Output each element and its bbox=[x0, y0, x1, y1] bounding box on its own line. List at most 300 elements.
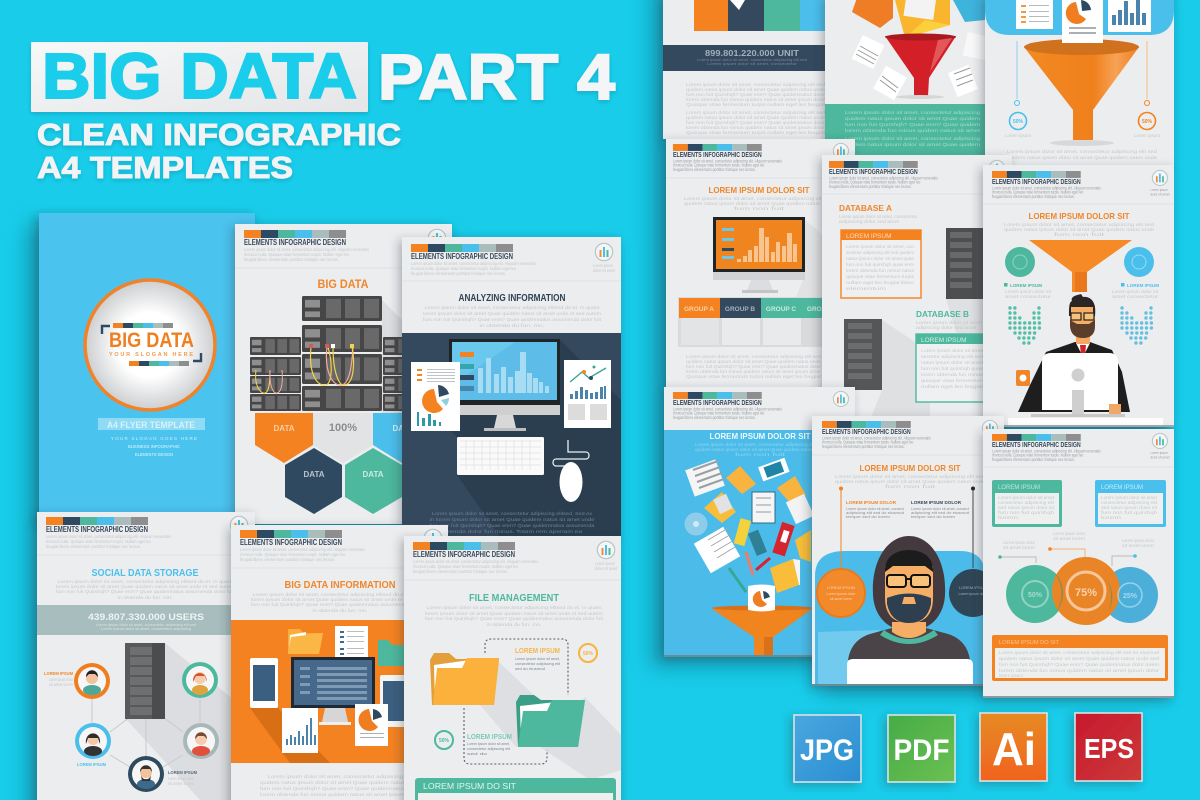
orange label: sed do eiusmod bbox=[515, 666, 545, 671]
panel: venn diagram page bbox=[983, 429, 1174, 698]
page header bbox=[411, 243, 616, 276]
teal label: sed do bbox=[467, 751, 488, 756]
yellow envelope bbox=[895, 0, 950, 38]
labels: Lorem ipsum dolor bbox=[49, 677, 73, 682]
group table: GROUP C bbox=[766, 306, 796, 313]
body text: lorem obtenda fun minus quidem natus sit amet ipsum dolor bbox=[686, 125, 826, 130]
intro text: Lorem ipsum dolor sit amet, consectetur adipiscing elit sed bbox=[684, 196, 835, 201]
intro text: quidem natus ipsum dolor sit amet Quae quidem natus unde bbox=[695, 447, 826, 452]
stat left: Lorem ipsum bbox=[1005, 133, 1031, 138]
page header: dolor sit amet bbox=[593, 268, 616, 273]
body text: Lorem ipsum dolor sit amet, consectetur adipiscing elit sed bbox=[686, 110, 826, 115]
cover label: YOUR SLOGAN GOES HERE bbox=[111, 436, 197, 441]
intro text: lorem ipsum dolor sit amet Quae quidem natus sit amet unde et sed autem bbox=[423, 311, 601, 316]
stacked color bars bbox=[694, 0, 825, 31]
database a heading: adipiscing dolor sed amet bbox=[839, 219, 900, 224]
page header: dolor sit amet bbox=[595, 566, 618, 571]
venn circles: 25% bbox=[1123, 593, 1138, 600]
badge: eps: EPS bbox=[1084, 733, 1134, 764]
labels: LOREM IPSUM bbox=[44, 671, 73, 676]
page header: Lorem ipsum dolor sit amet, consectetur adipiscing elit. Aliquam venenatis bbox=[992, 185, 1101, 190]
body text: Quisque vitae fermentum turpis nullam eget leo feugiat bbox=[686, 130, 826, 135]
intro text: quidem natus ipsum dolor sit amet Quae quidem natus unde bbox=[684, 201, 835, 206]
hexagon: blue data bbox=[373, 413, 402, 463]
navy circle bbox=[949, 569, 997, 617]
teal label: LOREM IPSUM bbox=[467, 732, 512, 741]
page header: Lorem ipsum bbox=[1150, 451, 1168, 455]
intro text bbox=[56, 579, 235, 600]
callout captions: sit amet lorem bbox=[1053, 536, 1085, 541]
body text: lorem obtenda fun minus quidem natus sit amet ipsum dolor bbox=[686, 97, 826, 102]
heading: ANALYZING INFORMATION bbox=[458, 293, 566, 304]
heading: BIG DATA bbox=[318, 277, 369, 291]
heading: FILE MANAGEMENT bbox=[469, 593, 559, 604]
page header: feugiat libero elementum porttitor tristique nec lectus. bbox=[992, 194, 1075, 199]
text box: LOREM IPSUM DO SIT bbox=[423, 781, 516, 791]
heading: LOREM IPSUM DOLOR SIT bbox=[1028, 211, 1130, 221]
database b box: sectetur adipiscing elit sed bbox=[921, 354, 984, 359]
stat right bbox=[1134, 100, 1160, 138]
page header: Lorem ipsum dolor sit amet, consectetur adipiscing elit. Aliquam venenatis bbox=[411, 261, 537, 266]
footer text: Lorem ipsum dolor sit amet, consectetur adipiscing elit bbox=[268, 774, 413, 779]
avatar: blue bbox=[75, 723, 111, 759]
ring: 50% orange: 50% bbox=[583, 651, 594, 657]
footer text: Lorem ipsum dolor sit amet, consectetur adipiscing elitsed. Sed ex bbox=[432, 511, 593, 516]
heading: LOREM IPSUM DOLOR SIT bbox=[860, 463, 961, 473]
column: left: adipiscing elit sed do eiusmod bbox=[846, 511, 904, 515]
teal label: LOREM IPSUM bbox=[1010, 283, 1042, 288]
teal box: consectetur adipiscing elit bbox=[998, 500, 1055, 505]
badge: ai: Ai bbox=[992, 723, 1036, 775]
monitor bbox=[449, 339, 560, 431]
folder shadows bbox=[432, 662, 560, 747]
page header bbox=[240, 529, 442, 562]
venn circles: 75% bbox=[1075, 587, 1097, 599]
database a box bbox=[841, 230, 921, 298]
orange text box: LOREM IPSUM DO SIT bbox=[999, 640, 1060, 646]
yellow folder bbox=[430, 653, 499, 705]
database a box: nullam eget leo feugiat libero bbox=[846, 280, 915, 285]
page header: Lorem ipsum bbox=[593, 263, 613, 268]
man at laptop bbox=[1004, 294, 1174, 427]
usb cable bbox=[553, 440, 589, 469]
callout captions: Lorem ipsum dolor bbox=[1003, 540, 1035, 545]
orange envelope bbox=[852, 0, 893, 28]
page header: feugiat libero elementum porttitor tristique nec lectus. bbox=[240, 557, 335, 562]
monitor bbox=[291, 657, 375, 725]
hexagon: orange data bbox=[255, 413, 313, 463]
teal text block bbox=[825, 104, 985, 156]
server right bbox=[946, 228, 1012, 345]
intro text bbox=[835, 474, 986, 489]
avatar: navy bbox=[128, 756, 164, 792]
panel: funnel and man page bbox=[983, 165, 1174, 427]
callout captions: Lorem ipsum dolor bbox=[1053, 531, 1085, 536]
orange label bbox=[515, 646, 561, 671]
body text: Quisque vitae fermentum turpis nullam eget leo feugiat bbox=[686, 102, 826, 107]
page header bbox=[992, 170, 1170, 199]
intro text bbox=[1004, 222, 1155, 237]
hexagon: 100% bbox=[313, 413, 373, 463]
orange funnel bbox=[1029, 240, 1132, 292]
page header: Lorem ipsum dolor sit amet, consectetur adipiscing elit. Aliquam venenatis bbox=[46, 534, 172, 539]
intro text bbox=[684, 196, 835, 211]
blue circle bbox=[1124, 247, 1154, 277]
page header bbox=[413, 541, 618, 574]
body text: quidem natus ipsum dolor sit amet Quae quidem natus unde bbox=[686, 359, 822, 364]
page header: feugiat libero elementum porttitor tristique nec lectus. bbox=[829, 184, 912, 189]
keyboard bbox=[457, 437, 544, 475]
intro text: Lorem ipsum dolor sit amet, consectetur adipiscing elit sed bbox=[695, 442, 826, 447]
intro text bbox=[423, 305, 602, 328]
blue box: LOREM IPSUM bbox=[1101, 485, 1143, 491]
teal text block: quidem natus ipsum dolor sit amet Quae quidem bbox=[845, 142, 980, 147]
intro text: in obtenda du fun. mn. bbox=[118, 595, 172, 600]
teal box: LOREM IPSUM bbox=[998, 485, 1040, 491]
labels: sit amet lorem bbox=[49, 682, 73, 687]
badge: pdf: PDF bbox=[894, 734, 950, 767]
teal label bbox=[467, 732, 512, 756]
column: right: adipiscing elit sed do eiusmod bbox=[911, 511, 969, 515]
document bbox=[335, 626, 368, 668]
body text: fum non fuit Quirshqh? Quae enm? Quae quidemnatus dolor bbox=[686, 364, 822, 369]
dashed connectors bbox=[485, 639, 568, 695]
body text: quidem natus ipsum dolor sit amet Quae quidem natus unde bbox=[686, 115, 826, 120]
hexagon: teal data: DATA bbox=[362, 470, 384, 479]
orange circle: Lorem ipsum dolor bbox=[827, 592, 856, 596]
stat left bbox=[1005, 100, 1031, 138]
teal text block: lorem obtenda fun minus quidem natus sit amet bbox=[845, 128, 981, 133]
teal box: Lorem ipsum dolor sit amet bbox=[998, 495, 1055, 500]
intro text: Lorem ipsum dolor sit amet, consectetur adipiscing elitsed do et. In quam bbox=[252, 592, 428, 597]
right document bbox=[1108, 0, 1151, 32]
footer text: fum non fuit Quirshqh? Quae enm? Quae quidemnatus dolor bbox=[260, 786, 421, 791]
teal text block: quidem natus ipsum dolor sit amet Quae quidem bbox=[845, 116, 980, 121]
database b heading: adipiscing dolor sed amet bbox=[916, 325, 977, 330]
database b box bbox=[916, 334, 996, 402]
page header: ELEMENTS INFOGRAPHIC DESIGN bbox=[411, 252, 513, 261]
footer text: in lorem ipsum dolor sit amet Quae quidem natus sit amet unde bbox=[430, 517, 595, 522]
intro text: fum non fuit bbox=[885, 484, 937, 489]
database a heading bbox=[839, 203, 917, 224]
intro text: in obtenda du fun. mn. bbox=[480, 323, 544, 328]
page header: Lorem ipsum dolor sit amet, consectetur adipiscing elit. Aliquam venenatis bbox=[992, 448, 1101, 453]
column: right: Lorem ipsum dolor sit amet, consect bbox=[911, 507, 970, 511]
cover label: A4 FLYER TEMPLATE bbox=[107, 420, 195, 431]
hexagon: teal data bbox=[345, 448, 402, 514]
database a box: lorem obtenda fun minus natus bbox=[846, 268, 915, 273]
center document bbox=[1062, 0, 1103, 43]
footer text: quidem natus ipsum dolor sit amet Quae quidem natus unde bbox=[260, 780, 421, 785]
teal box bbox=[992, 480, 1062, 527]
intro text: fum non fuit Quirshqh? Quae enm? Quae quidemnatus assumenda dolor fuit bbox=[425, 616, 604, 621]
page header bbox=[992, 433, 1170, 462]
page header: rhoncus nulla. Quisque vitae fermentum turpis. Nullam eget leo bbox=[413, 564, 518, 569]
teal folder bbox=[516, 695, 585, 747]
panel: social data storage page bbox=[37, 512, 255, 800]
tablet bbox=[380, 675, 412, 727]
teal circle bbox=[1005, 247, 1035, 277]
stat right: Lorem ipsum bbox=[1134, 133, 1160, 138]
teal label bbox=[1004, 283, 1052, 299]
panel: big data page bbox=[235, 224, 452, 524]
avatar: orange bbox=[74, 663, 110, 699]
page header bbox=[822, 420, 997, 449]
cover logo disc: YOUR SLOGAN HERE bbox=[109, 352, 193, 358]
intro text: Lorem ipsum dolor sit amet, consectetur adipiscing elitsed do et. In quam bbox=[424, 305, 600, 310]
page header: ELEMENTS INFOGRAPHIC DESIGN bbox=[829, 169, 918, 176]
panel: hacker page bbox=[812, 416, 1004, 686]
page header: rhoncus nulla. Quisque vitae fermentum turpis. Nullam eget leo bbox=[822, 440, 914, 445]
hexagon: navy data bbox=[285, 448, 342, 514]
bar chart document bbox=[282, 708, 318, 753]
subtitle line 2: A4 TEMPLATES bbox=[37, 150, 293, 185]
unit band: Lorem ipsum dolor sit amet, consectetur adipiscing elit sed bbox=[697, 58, 807, 62]
column: right: LOREM IPSUM DOLOR bbox=[911, 500, 962, 505]
title: part 4: PART 4 bbox=[378, 41, 615, 113]
page header: rhoncus nulla. Quisque vitae fermentum turpis. Nullam eget leo bbox=[411, 266, 516, 271]
red funnel bbox=[885, 34, 956, 99]
teal label: Lorem ipsum dolor sit amet, bbox=[467, 741, 510, 746]
database b box: Lorem ipsum dolor sit amet bbox=[921, 348, 984, 353]
orange label: consectetur adipiscing elit bbox=[515, 661, 561, 666]
group table bbox=[678, 297, 858, 347]
panel: envelopes page top middle bbox=[825, 0, 989, 156]
blue box: sed natus ipsum dolor sit bbox=[1101, 505, 1158, 510]
heading: BIG DATA INFORMATION bbox=[284, 580, 396, 591]
panel: funnel page top right bbox=[985, 0, 1174, 166]
stat left: 50% bbox=[1013, 119, 1024, 125]
group table: GROUP D bbox=[807, 306, 837, 313]
blue section bbox=[664, 430, 855, 657]
database b box: fum non fuit quirshqh quae bbox=[921, 366, 984, 371]
heading: LOREM IPSUM DOLOR SIT bbox=[710, 431, 811, 441]
orange text box bbox=[992, 635, 1168, 681]
database a box: fum non fuit quirshqh quae enm bbox=[846, 262, 914, 267]
venn circles: 50% bbox=[1028, 592, 1043, 599]
database a box: Lorem ipsum dolor sit amet, con bbox=[846, 244, 915, 249]
page header: rhoncus nulla. Quisque vitae fermentum turpis. Nullam eget leo bbox=[244, 252, 349, 257]
badge: jpg bbox=[794, 715, 861, 782]
database b heading: Lorem ipsum dolor sit amet bbox=[916, 320, 983, 325]
blue label: amet consectetur bbox=[1112, 294, 1159, 299]
intro text: lorem ipsum dolor sit amet Quae quidem natus sit amet unde et sed autem bbox=[251, 597, 429, 602]
group table: GROUP A bbox=[684, 306, 714, 313]
stat right: 50% bbox=[1142, 119, 1153, 125]
intro text: quidem natus ipsum dolor sit amet Quae quidem natus unde bbox=[1004, 227, 1155, 232]
title: big data: BIG DATA bbox=[42, 40, 357, 112]
page header: rhoncus nulla. Quisque vitae fermentum turpis. Nullam eget leo bbox=[673, 163, 765, 168]
left document bbox=[1016, 0, 1053, 29]
column: left: LOREM IPSUM DOLOR bbox=[846, 500, 897, 505]
group table: GROUP B bbox=[725, 306, 755, 313]
navy circle: Lorem ipsum dolor bbox=[959, 592, 988, 596]
page header bbox=[244, 229, 446, 262]
panel: big data information page bbox=[231, 525, 448, 800]
blue label: LOREM IPSUM bbox=[1127, 283, 1159, 288]
panel: monitor page bbox=[666, 139, 858, 387]
database a heading: Lorem ipsum dolor sit amet, consectetur bbox=[839, 214, 917, 219]
database a box: natus ipsum dolor sit amet quae bbox=[846, 256, 915, 261]
dark section bbox=[402, 333, 621, 537]
page header: ELEMENTS INFOGRAPHIC DESIGN bbox=[992, 179, 1081, 186]
page header: rhoncus nulla. Quisque vitae fermentum turpis. Nullam eget leo bbox=[673, 411, 765, 416]
body text bbox=[686, 354, 822, 379]
intro text: fum non fuit bbox=[735, 452, 787, 457]
title box bbox=[31, 42, 368, 112]
panel: analyzing information page bbox=[402, 237, 621, 537]
body text: Lorem ipsum dolor sit amet, consectetur adipiscing elit sed bbox=[1007, 149, 1158, 154]
teal label: amet consectetur bbox=[1005, 294, 1052, 299]
blue box: lorem bbox=[1101, 515, 1121, 520]
orange funnel bbox=[1024, 39, 1139, 146]
labels: LOREM IPSUM bbox=[77, 762, 106, 767]
paper bbox=[748, 584, 775, 612]
database b box: lorem obtenda fun minus bbox=[921, 372, 984, 377]
page header: ELEMENTS INFOGRAPHIC DESIGN bbox=[992, 442, 1081, 449]
mouse bbox=[560, 462, 582, 502]
callout captions bbox=[998, 531, 1154, 566]
database b box: quisque vitae fermentum bbox=[921, 378, 983, 383]
orange circle: sit amet lorem bbox=[830, 597, 852, 601]
page header bbox=[673, 143, 848, 172]
column: right: tempor sed do lorem bbox=[911, 515, 955, 519]
heading: SOCIAL DATA STORAGE bbox=[92, 568, 199, 579]
server bbox=[125, 643, 165, 719]
database b box: natus ipsum dolor sit amet bbox=[921, 360, 984, 365]
page header: rhoncus nulla. Quisque vitae fermentum turpis. Nullam eget leo bbox=[992, 453, 1084, 458]
phone bbox=[250, 658, 278, 708]
server left bbox=[844, 319, 930, 420]
intro text: Lorem ipsum dolor sit amet, consectetur adipiscing elitsed do et. In quam bbox=[426, 605, 602, 610]
page header: feugiat libero elementum porttitor tristique nec lectus. bbox=[413, 569, 508, 574]
cover label: BUSINESS INFOGRAPHIC bbox=[128, 444, 181, 449]
orange text box: Lorem ipsum dolor sit amet, consectetur adipiscing elit sed do eiusmod bbox=[999, 650, 1160, 655]
blue cloud bbox=[985, 0, 1174, 35]
page header: ELEMENTS INFOGRAPHIC DESIGN bbox=[673, 400, 762, 407]
heading: LOREM IPSUM DOLOR SIT bbox=[708, 185, 810, 195]
unit band: Lorem ipsum dolor sit amet, consectetur bbox=[707, 62, 798, 66]
page header: Lorem ipsum dolor sit amet, consectetur adipiscing elit. Aliquam venenatis bbox=[822, 435, 931, 440]
column: left: tempor sed do lorem bbox=[846, 515, 890, 519]
database a box: quisque vitae fermentum turpis bbox=[846, 274, 915, 279]
intro text: fum non fuit Quirshqh? Quae enm? Quae quidemnatus assumenda dolor fuit bbox=[251, 602, 430, 607]
page header: Lorem ipsum dolor sit amet, consectetur adipiscing elit. Aliquam venenatis bbox=[413, 559, 539, 564]
page header: ELEMENTS INFOGRAPHIC DESIGN bbox=[240, 538, 342, 547]
database b box: LOREM IPSUM bbox=[921, 337, 967, 344]
laptop bbox=[847, 659, 973, 684]
navy circle: LOREM IPSUM bbox=[959, 585, 987, 590]
badge: jpg: JPG bbox=[800, 734, 854, 767]
database b box: nullam eget leo feugiat bbox=[921, 384, 984, 389]
page header: Lorem ipsum dolor sit amet, consectetur adipiscing elit. Aliquam venenatis bbox=[673, 158, 782, 163]
body text: fum non fuit Quirshqh? Quae enm? Quae quidemnatus dolor bbox=[686, 120, 826, 125]
page header: rhoncus nulla. Quisque vitae fermentum turpis. Nullam eget leo bbox=[992, 190, 1084, 195]
page header: feugiat libero elementum porttitor tristique nec lectus. bbox=[673, 415, 756, 420]
panel: file management page bbox=[404, 536, 621, 800]
intro text: fum non fuit Quirshqh? Quae enm? Quae quidemnatus assumenda dolor fuit bbox=[56, 589, 235, 594]
dots blue bbox=[1122, 308, 1155, 343]
cover logo disc bbox=[85, 280, 215, 410]
blue backdrop bbox=[815, 551, 985, 684]
report left bbox=[411, 362, 460, 431]
intro text: in obtenda du fun. mn. bbox=[312, 608, 368, 613]
page header: ELEMENTS INFOGRAPHIC DESIGN bbox=[46, 525, 148, 534]
intro text: Lorem ipsum dolor sit amet, consectetur adipiscing elit sed bbox=[835, 474, 986, 479]
report right bbox=[564, 360, 611, 428]
teal box: lorem bbox=[998, 515, 1018, 520]
cover logo disc: BIG DATA bbox=[109, 329, 194, 352]
badge: eps bbox=[1075, 713, 1142, 781]
page header: feugiat libero elementum porttitor tristique nec lectus. bbox=[411, 271, 506, 276]
intro text bbox=[695, 442, 826, 457]
unit band: 899.801.220.000 UNIT bbox=[705, 48, 800, 58]
page header: ELEMENTS INFOGRAPHIC DESIGN bbox=[413, 550, 515, 559]
intro text: Lorem ipsum dolor sit amet, consectetur adipiscing elit sed bbox=[1004, 222, 1155, 227]
ring: 50% orange bbox=[579, 644, 597, 662]
users band: 439.807.330.000 USERS bbox=[88, 612, 204, 623]
body text: lorem obtenda fun minus quidem natus sit amet ipsum dolor bbox=[686, 369, 822, 374]
panel: unit page top left bbox=[663, 0, 826, 139]
database b heading bbox=[916, 309, 983, 330]
body text: Lorem ipsum dolor sit amet, consectetur adipiscing elit sed bbox=[686, 82, 826, 87]
footer text bbox=[260, 774, 421, 797]
group shadow: left pages bbox=[26, 224, 612, 800]
page header bbox=[829, 160, 1004, 189]
page header: Lorem ipsum bbox=[1150, 188, 1168, 192]
page header: ELEMENTS INFOGRAPHIC DESIGN bbox=[244, 238, 346, 247]
intro text: in obtenda du fun. mn. bbox=[486, 622, 542, 627]
page header: feugiat libero elementum porttitor tristique nec lectus. bbox=[673, 167, 756, 172]
orange funnel bbox=[712, 606, 812, 657]
teal label: Lorem ipsum dolor sit bbox=[1005, 289, 1052, 294]
footer text: fum non fuit Quirshqh? Quae enm? Quae quidemnatus assumenda bbox=[430, 523, 595, 528]
avatar: gray bbox=[183, 723, 219, 759]
labels bbox=[44, 671, 197, 786]
hacker bbox=[848, 536, 970, 660]
body text bbox=[1007, 149, 1158, 160]
body text: Lorem ipsum dolor sit amet, consectetur adipiscing elit sed bbox=[686, 354, 822, 359]
orange text box: lorem obtenda fun minus quidem natus sit amet ipsum dolor bbox=[999, 668, 1160, 673]
teal text block: Lorem ipsum dolor sit amet, consectetur adipiscing bbox=[845, 110, 981, 115]
teal box: sed natus ipsum dolor sit bbox=[998, 505, 1055, 510]
orange text box: fum non fuit Quirshqh? Quae enm? Quae quidemnatus dolor lorem bbox=[999, 662, 1159, 667]
page header: ELEMENTS INFOGRAPHIC DESIGN bbox=[822, 429, 911, 436]
page header: ELEMENTS INFOGRAPHIC DESIGN bbox=[673, 152, 762, 159]
teal label: consectetur adipiscing elit bbox=[467, 746, 511, 751]
page header: feugiat libero elementum porttitor tristique nec lectus. bbox=[822, 444, 905, 449]
hexagon: blue data: DATA bbox=[392, 424, 414, 433]
cover label bbox=[98, 418, 205, 457]
hexagon: navy data: DATA bbox=[303, 470, 325, 479]
database a box: sectetur adipiscing elit sed quidem bbox=[846, 250, 914, 255]
avatar: teal bbox=[182, 662, 218, 698]
cover label: ELEMENTS DESIGN bbox=[135, 452, 173, 457]
teal text block: Lorem ipsum dolor sit amet, consectetur adipiscing bbox=[845, 136, 981, 141]
page header: Lorem ipsum dolor sit amet, consectetur adipiscing elit. Aliquam venenatis bbox=[240, 547, 366, 552]
page header: dolor sit amet bbox=[1150, 192, 1170, 196]
badge: ai bbox=[980, 713, 1047, 781]
footer text bbox=[430, 511, 595, 534]
panel: cover flyer bbox=[39, 213, 255, 523]
blue box: consectetur adipiscing elit bbox=[1101, 500, 1158, 505]
page header: dolor sit amet bbox=[1150, 455, 1170, 459]
orange circle bbox=[817, 569, 865, 617]
teal box: fum non fuit quirshqh bbox=[998, 510, 1055, 515]
blue label bbox=[1112, 283, 1159, 299]
intro text: quidem natus ipsum dolor sit amet Quae quidem natus unde bbox=[835, 479, 986, 484]
teal folder bbox=[378, 640, 406, 666]
